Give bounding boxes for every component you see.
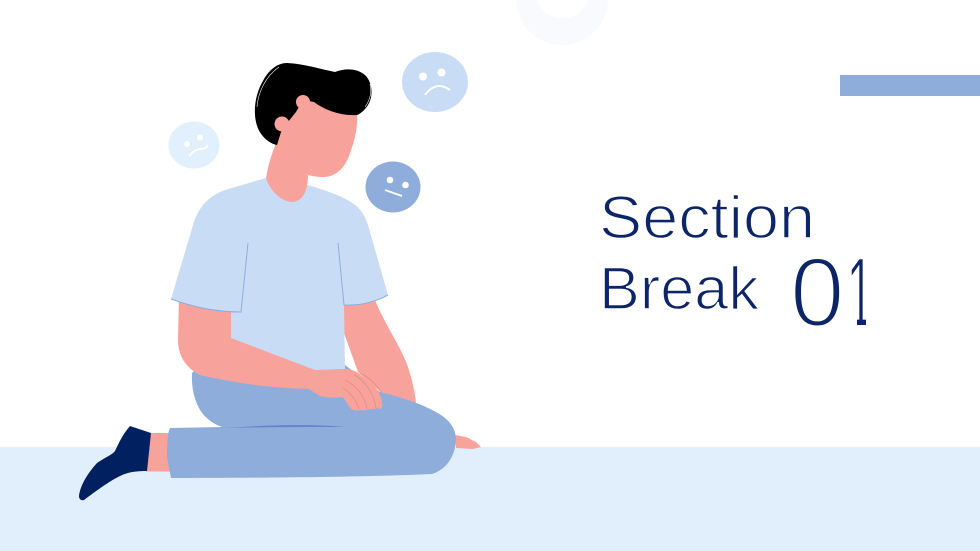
ear <box>274 95 310 132</box>
jeans crease <box>222 425 345 428</box>
foot skin <box>146 433 172 472</box>
neck and face <box>266 97 357 202</box>
hair <box>255 63 372 145</box>
finger lines <box>343 373 382 409</box>
heading: Section Break: Section <box>599 184 815 251</box>
accent bar <box>840 75 980 96</box>
icon: worried face small <box>168 122 220 168</box>
illustration: seated man <box>79 63 481 500</box>
decorative ring <box>516 0 608 45</box>
heading: Section Break: Break <box>599 255 760 322</box>
sock <box>79 426 151 500</box>
floor band <box>0 447 980 551</box>
section number 01: 1 <box>846 239 874 348</box>
icon: sad face large <box>402 52 468 112</box>
back arm <box>344 300 416 403</box>
hair highlights <box>257 67 371 107</box>
section number 01: 0 <box>790 237 845 347</box>
section number 01 <box>795 259 866 326</box>
sleeve lines <box>171 243 388 312</box>
fingers on floor <box>455 435 481 449</box>
t-shirt <box>171 178 388 370</box>
heading: Section Break <box>599 184 815 322</box>
front arm and hand <box>178 295 382 410</box>
jeans <box>167 365 456 478</box>
icon: neutral face <box>366 162 420 212</box>
